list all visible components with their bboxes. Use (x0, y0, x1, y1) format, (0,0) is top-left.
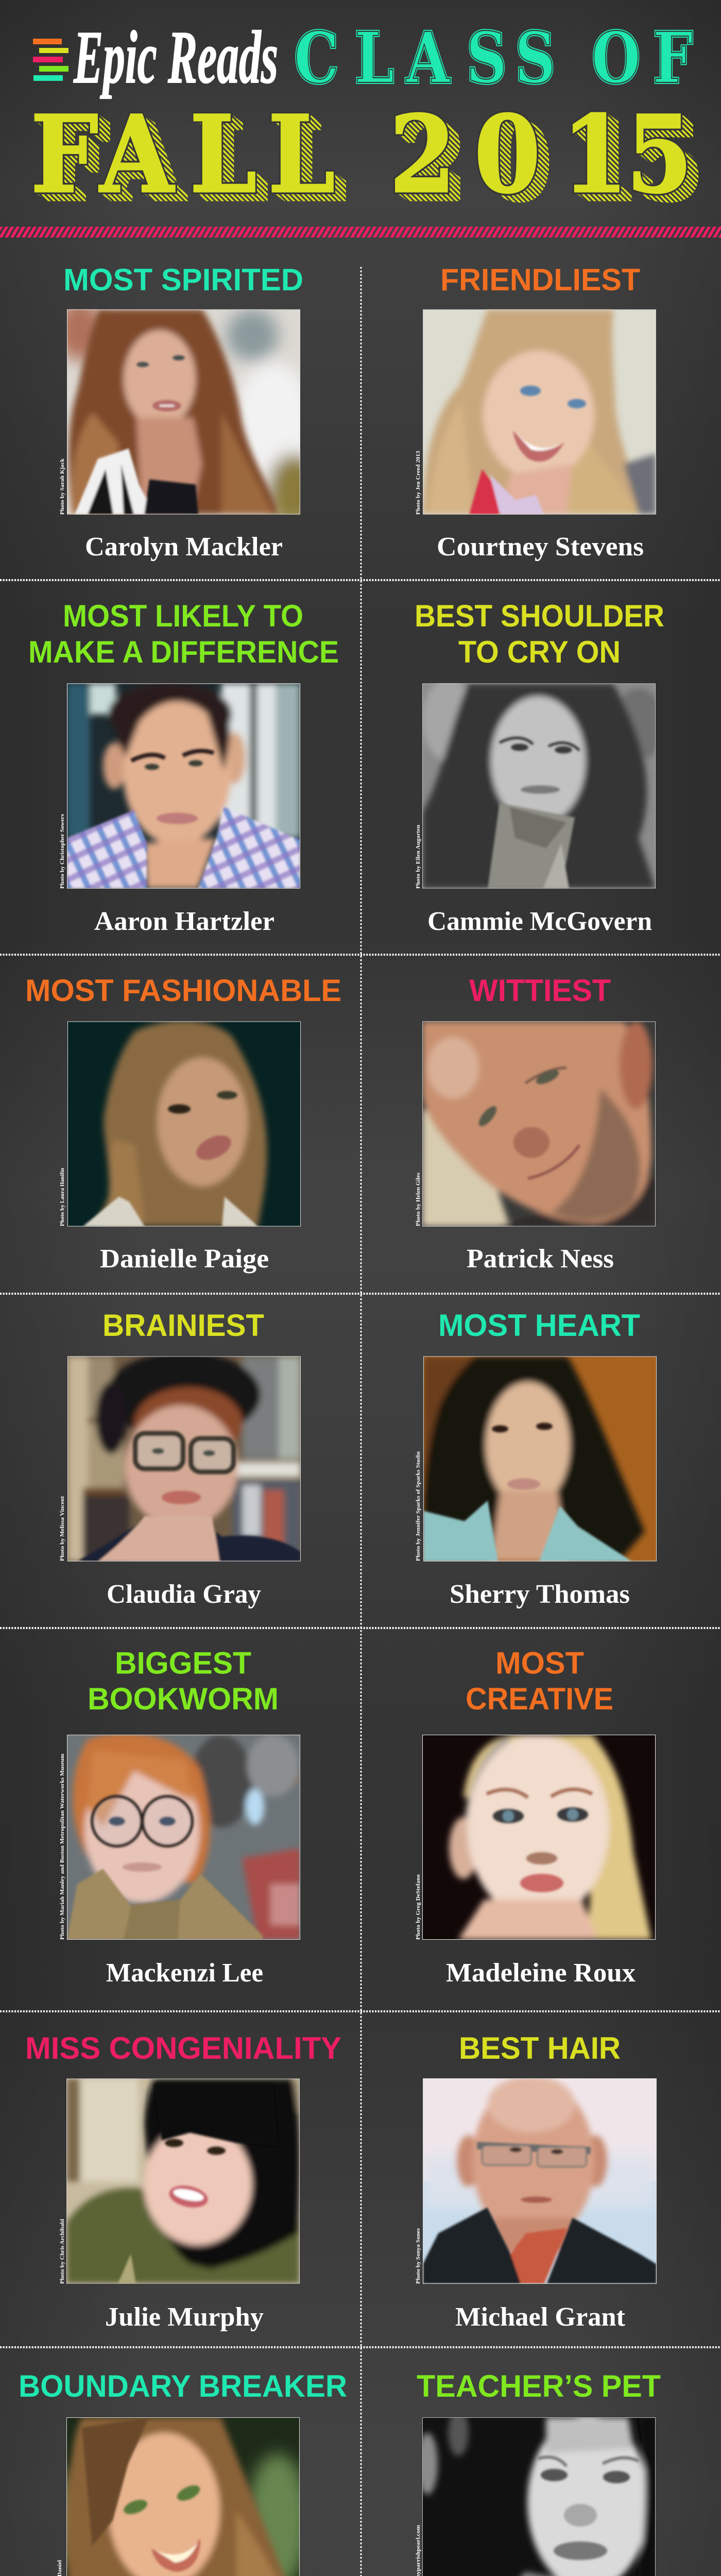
photo credit: Photo by Jen Creed 2013 (415, 450, 421, 515)
photo credit: Photo by Helen Giles (415, 1172, 421, 1226)
photo: Sherry Thomas (423, 1356, 657, 1562)
name: Julie Murphy (105, 2302, 264, 2332)
heading (28, 599, 339, 669)
photo: Claudia Gray (67, 1356, 301, 1562)
photo credit: Photo by Ellen Augarten (415, 825, 421, 889)
name: Mackenzi Lee (106, 1958, 263, 1988)
photo: Aaron Hartzler (67, 683, 300, 889)
heading (415, 599, 664, 669)
panel: Most Heart (415, 1308, 657, 1609)
name: Danielle Paige (100, 1244, 269, 1274)
photo: Julie Murphy (66, 2078, 300, 2284)
name: Courtney Stevens (437, 532, 644, 562)
panel: Teacher's Pet (415, 2369, 661, 2576)
heading: BEST HAIR (459, 2031, 621, 2065)
name: Cammie McGovern (427, 907, 652, 936)
heading: MOST FASHIONABLE (25, 973, 341, 1008)
photo: Rae Carson (66, 2417, 300, 2576)
heading: BIGGEST (115, 1646, 251, 1681)
heading: MAKE A DIFFERENCE (28, 635, 339, 669)
photo: Carolyn Mackler (67, 309, 300, 515)
name: Madeleine Roux (446, 1958, 636, 1988)
name: Sherry Thomas (450, 1580, 630, 1609)
heading: MOST (495, 1646, 584, 1681)
heading: FALL 2015: FALL 2015 (30, 93, 693, 217)
vertical dotted column divider (360, 267, 362, 2576)
heading: TEACHER’S PET (417, 2369, 661, 2403)
panel: Wittiest (415, 973, 656, 1274)
heading: CREATIVE (466, 1682, 613, 1716)
name: Claudia Gray (107, 1580, 261, 1609)
photo: Danielle Paige (67, 1021, 301, 1227)
photo: Mindy McGinnis (422, 2417, 656, 2576)
panel: Best Shoulder to Cry On (415, 599, 664, 936)
panel: Best Hair (415, 2031, 657, 2332)
photo: Madeleine Roux (422, 1735, 656, 1940)
photo: Patrick Ness (422, 1021, 656, 1227)
name: Carolyn Mackler (85, 532, 283, 562)
heading: BEST SHOULDER (415, 599, 664, 633)
heading: MOST LIKELY TO (63, 599, 303, 633)
photo credit: Photo by Jennifer Sparks of Sparks Studio (415, 1451, 421, 1561)
heading: MISS CONGENIALITY (25, 2031, 341, 2065)
photo credit: Photo by Chris Archibald (59, 2219, 65, 2284)
name: Michael Grant (455, 2302, 626, 2332)
panel: Most Creative (415, 1646, 656, 1988)
name: Aaron Hartzler (94, 907, 274, 936)
photo: Cammie McGovern (422, 683, 656, 889)
photo: Mackenzi Lee (67, 1735, 300, 1940)
heading: MOST HEART (438, 1308, 640, 1343)
photo credit: Photo by Melissa Vincent (59, 1496, 65, 1561)
photo credit: Photo by Laura Hanifin (59, 1168, 65, 1226)
panel: Most Spirited (57, 263, 319, 562)
heading: BOUNDARY BREAKER (19, 2369, 347, 2403)
heading: FALL 2015: FALL 2015 (30, 93, 693, 217)
photo credit: Photo by Sonya Sones (415, 2228, 421, 2284)
panel: Miss Congeniality (25, 2031, 341, 2332)
heading (466, 1646, 613, 1716)
panel: Most Fashionable (25, 973, 341, 1274)
photo credit: Photo by Greg DeStefano (415, 1874, 421, 1940)
panel: Brainiest (59, 1308, 301, 1609)
photo: Michael Grant (423, 2078, 657, 2284)
photo credit: Photo by Christopher Sowers (59, 814, 65, 889)
heading: BOOKWORM (88, 1682, 279, 1716)
header (33, 29, 698, 203)
heading: CLASS OF: CLASS OF (294, 17, 693, 99)
heading: MOST SPIRITED (63, 263, 303, 297)
heading: BRAINIEST (102, 1308, 264, 1343)
heading: WITTIEST (469, 973, 611, 1008)
name: Patrick Ness (467, 1244, 614, 1274)
heading: CLASS OF: CLASS OF (294, 17, 693, 99)
top stripe divider (0, 227, 721, 238)
logo: Epic Reads (33, 15, 278, 99)
heading (88, 1646, 279, 1716)
panel: Friendliest (415, 263, 656, 562)
horizontal dotted row dividers (0, 580, 721, 2576)
photo: Courtney Stevens (423, 309, 656, 515)
heading: TO CRY ON (458, 635, 621, 669)
photo credit: Photo by Mariah Manley and Boston Metropolitan Waterworks Museum (59, 1754, 65, 1940)
photo credit: Photo by Sarah Kjock (59, 458, 65, 515)
panel: Most Likely to Make a Difference (28, 599, 339, 936)
panel: Boundary Breaker (19, 2369, 347, 2576)
heading: FRIENDLIEST (440, 263, 640, 297)
panel: Biggest Bookworm (59, 1646, 300, 1988)
logo: Epic Reads: Epic Reads (73, 15, 278, 99)
